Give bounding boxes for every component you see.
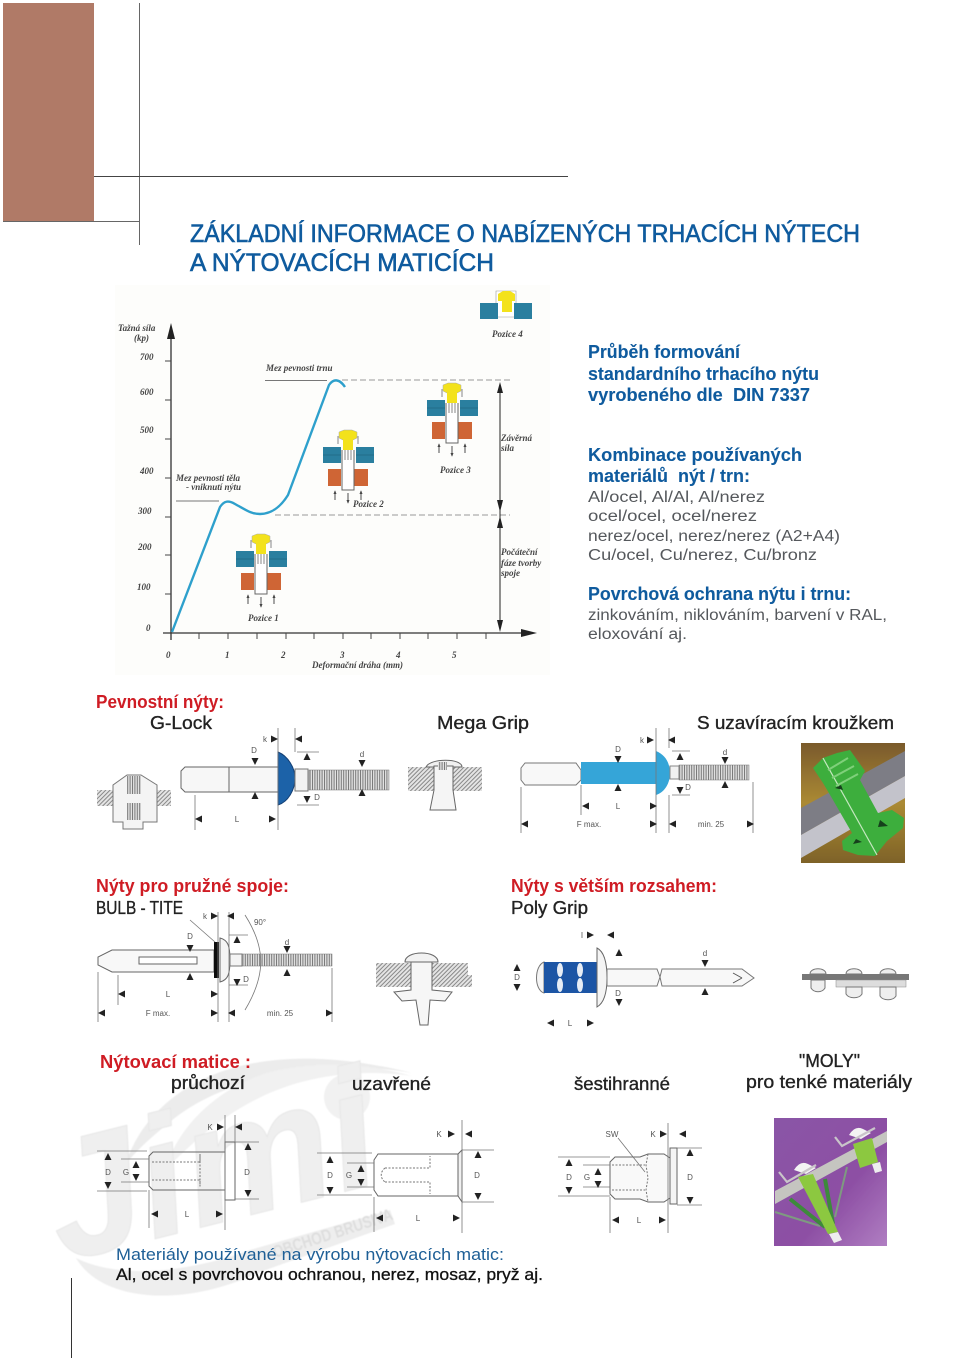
diagram: G-Lock dimensions: d bbox=[360, 750, 364, 759]
diagram: hexagonal rivet nut: SW bbox=[606, 1130, 619, 1139]
chart labels: 200 bbox=[137, 542, 152, 552]
diagram: hexagonal rivet nut: D bbox=[566, 1173, 572, 1182]
diagram: BULB-TITE dimensions: 90° bbox=[254, 918, 266, 927]
chart labels: Pozice 3 bbox=[440, 465, 471, 475]
label: G-Lock: G-Lock bbox=[150, 713, 213, 733]
diagram: Poly Grip dimensions: L bbox=[568, 1019, 573, 1028]
text block: surface protection bbox=[588, 584, 887, 643]
chart labels: Pozice 1 bbox=[248, 613, 279, 623]
diagram: hexagonal rivet nut: G bbox=[584, 1173, 590, 1182]
diagram: G-Lock dimensions: L bbox=[235, 815, 240, 824]
text block: surface protection: eloxování aj. bbox=[588, 626, 687, 643]
chart labels: fáze tvorby bbox=[501, 558, 542, 568]
text block: nut materials: Materiály používané na výrobu nýtovacích matic: bbox=[116, 1246, 504, 1264]
diagram: Mega Grip installed bbox=[408, 760, 482, 810]
diagram: through rivet nut: K bbox=[207, 1123, 213, 1132]
diagram: Poly Grip dimensions: d bbox=[703, 949, 707, 958]
diagram: Poly Grip installed bbox=[802, 969, 909, 1000]
chart labels: Mez pevnosti trnu bbox=[265, 363, 333, 373]
chart labels: Pozice 4 bbox=[492, 329, 523, 339]
text block: nut materials bbox=[116, 1246, 543, 1284]
chart labels: spoje bbox=[500, 568, 520, 578]
chart labels: 3 bbox=[339, 650, 345, 660]
diagram: Mega Grip dimensions: L bbox=[616, 802, 621, 811]
diagram: hexagonal rivet nut: L bbox=[637, 1216, 642, 1225]
diagram: BULB-TITE dimensions: min. 25 bbox=[267, 1009, 294, 1018]
chart labels: Mez pevnosti těla bbox=[175, 473, 240, 483]
chart labels: 600 bbox=[140, 387, 154, 397]
chart labels: 0 bbox=[146, 623, 151, 633]
diagram: Mega Grip dimensions: D bbox=[615, 745, 621, 754]
label: Poly Grip: Poly Grip bbox=[511, 898, 588, 918]
heading: rivet nuts: Nýtovací matice : bbox=[100, 1052, 251, 1072]
text block: material combinations bbox=[588, 445, 840, 564]
label: MOLY: pro tenké materiály bbox=[746, 1072, 912, 1092]
diagram: through rivet nut: L bbox=[185, 1210, 190, 1219]
text block: material combinations: ocel/ocel, ocel/nerez bbox=[588, 508, 757, 525]
chart labels: - vniknutí nýtu bbox=[186, 482, 241, 492]
label: MOLY bbox=[746, 1051, 912, 1092]
diagram: through rivet nut: G bbox=[123, 1168, 129, 1177]
chart labels: 300 bbox=[137, 506, 152, 516]
label: closing ring: S uzavíracím kroužkem bbox=[697, 713, 894, 733]
title: ZÁKLADNÍ INFORMACE O NABÍZENÝCH TRHACÍCH NÝTECH bbox=[190, 219, 860, 248]
diagram: BULB-TITE dimensions: L bbox=[166, 990, 171, 999]
diagram: closed rivet nut: K bbox=[436, 1130, 442, 1139]
watermark: Jimi logo: OBCHOD BRUSIVA bbox=[270, 1205, 395, 1262]
diagram: BULB-TITE dimensions: k bbox=[203, 912, 208, 921]
chart labels: (kp) bbox=[134, 333, 149, 343]
diagram: closed rivet nut: D bbox=[327, 1171, 333, 1180]
diagram: G-Lock dimensions bbox=[181, 728, 389, 830]
text block: surface protection: Povrchová ochrana nýtu i trnu: bbox=[588, 584, 851, 604]
diagram: Mega Grip dimensions: d bbox=[723, 748, 727, 757]
chart labels: 100 bbox=[137, 582, 151, 592]
chart labels: 4 bbox=[395, 650, 401, 660]
diagram: closed rivet nut bbox=[317, 1120, 494, 1233]
diagram: hexagonal rivet nut: D bbox=[687, 1173, 693, 1182]
diagram: closed rivet nut: D bbox=[474, 1171, 480, 1180]
photo: closing-ring rivet bbox=[801, 743, 905, 863]
diagram: through rivet nut: D bbox=[244, 1168, 250, 1177]
text block: formation: Průběh formování bbox=[588, 342, 741, 362]
label: through: průchozí bbox=[171, 1073, 245, 1093]
diagram: Poly Grip dimensions bbox=[514, 931, 754, 1028]
diagram: Poly Grip dimensions: D bbox=[615, 989, 621, 998]
diagram: Mega Grip dimensions: F max. bbox=[577, 820, 601, 829]
diagram: BULB-TITE dimensions: D bbox=[187, 932, 193, 941]
chart labels: Tažná síla bbox=[118, 323, 156, 333]
label: BULB-TITE: BULB - TITE bbox=[96, 898, 183, 918]
chart labels: Pozice 2 bbox=[353, 499, 384, 509]
diagram: BULB-TITE dimensions: D bbox=[243, 975, 249, 984]
chart labels: 1 bbox=[225, 650, 230, 660]
diagram: through rivet nut: D bbox=[105, 1168, 111, 1177]
text block: material combinations: nerez/ocel, nerez/nerez (A2+A4) bbox=[588, 528, 840, 545]
diagram: Poly Grip dimensions: D bbox=[514, 973, 520, 982]
diagram: BULB-TITE dimensions: d bbox=[285, 938, 289, 947]
chart labels bbox=[118, 323, 542, 670]
chart labels: Závěrná bbox=[500, 433, 532, 443]
chart: rivet pull force vs deformation bbox=[115, 285, 550, 675]
text block: formation bbox=[588, 342, 819, 405]
chart labels: 400 bbox=[139, 466, 154, 476]
chart labels: 5 bbox=[452, 650, 457, 660]
chart labels: 2 bbox=[280, 650, 286, 660]
diagram: through rivet nut bbox=[97, 1115, 259, 1230]
diagram: closed rivet nut: G bbox=[346, 1171, 352, 1180]
chart labels: síla bbox=[500, 443, 515, 453]
title bbox=[190, 219, 860, 277]
diagram: G-Lock dimensions: D bbox=[314, 793, 320, 802]
label: closed: uzavřené bbox=[352, 1074, 431, 1094]
diagram: closed rivet nut: L bbox=[416, 1214, 421, 1223]
diagram: BULB-TITE dimensions bbox=[98, 912, 333, 1022]
diagram: hexagonal rivet nut: K bbox=[650, 1130, 656, 1139]
diagram: G-Lock dimensions: D bbox=[251, 746, 257, 755]
label: Mega Grip: Mega Grip bbox=[437, 713, 529, 733]
diagram: hexagonal rivet nut bbox=[558, 1123, 702, 1233]
diagram: Poly Grip dimensions: I bbox=[581, 931, 583, 940]
text block: surface protection: zinkováním, niklováním, barvení v RAL, bbox=[588, 607, 887, 624]
diagram: G-Lock installed bbox=[97, 775, 171, 829]
diagram: Mega Grip dimensions: D bbox=[685, 783, 691, 792]
chart labels: 500 bbox=[140, 425, 154, 435]
text block: material combinations: materiálů nýt / trn: bbox=[588, 466, 750, 486]
text block: formation: standardního trhacího nýtu bbox=[588, 364, 819, 384]
text block: material combinations: Cu/ocel, Cu/nerez, Cu/bronz bbox=[588, 547, 817, 564]
chart labels: 0 bbox=[166, 650, 171, 660]
decorative brown block bbox=[3, 3, 94, 221]
text block: material combinations: Al/ocel, Al/Al, Al/nerez bbox=[588, 489, 765, 506]
text block: formation: vyrobeného dle DIN 7337 bbox=[588, 385, 810, 405]
chart labels: Počáteční bbox=[501, 547, 539, 557]
photo: MOLY rivet bbox=[774, 1118, 887, 1246]
chart labels: 700 bbox=[140, 352, 154, 362]
chart labels: Deformační dráha (mm) bbox=[311, 660, 403, 670]
diagram: Mega Grip dimensions: k bbox=[640, 736, 645, 745]
watermark: Jimi logo: Jimi bbox=[25, 1032, 400, 1298]
label: MOLY: "MOLY" bbox=[799, 1051, 860, 1071]
text block: nut materials: Al, ocel s povrchovou ochranou, nerez, mosaz, pryž aj. bbox=[116, 1266, 543, 1284]
diagram: BULB-TITE installed bbox=[376, 953, 472, 1025]
heading: flexible joints: Nýty pro pružné spoje: bbox=[96, 876, 289, 896]
label: hexagonal: šestihranné bbox=[574, 1074, 670, 1094]
heading: large range: Nýty s větším rozsahem: bbox=[511, 876, 717, 896]
diagram: BULB-TITE dimensions: F max. bbox=[146, 1009, 170, 1018]
diagram: G-Lock dimensions: k bbox=[263, 735, 268, 744]
text block: material combinations: Kombinace používaných bbox=[588, 445, 802, 465]
heading: structural rivets: Pevnostní nýty: bbox=[96, 692, 224, 712]
title: A NÝTOVACÍCH MATICÍCH bbox=[190, 248, 494, 277]
diagram: Mega Grip dimensions bbox=[521, 728, 754, 833]
diagram: Mega Grip dimensions: min. 25 bbox=[698, 820, 725, 829]
